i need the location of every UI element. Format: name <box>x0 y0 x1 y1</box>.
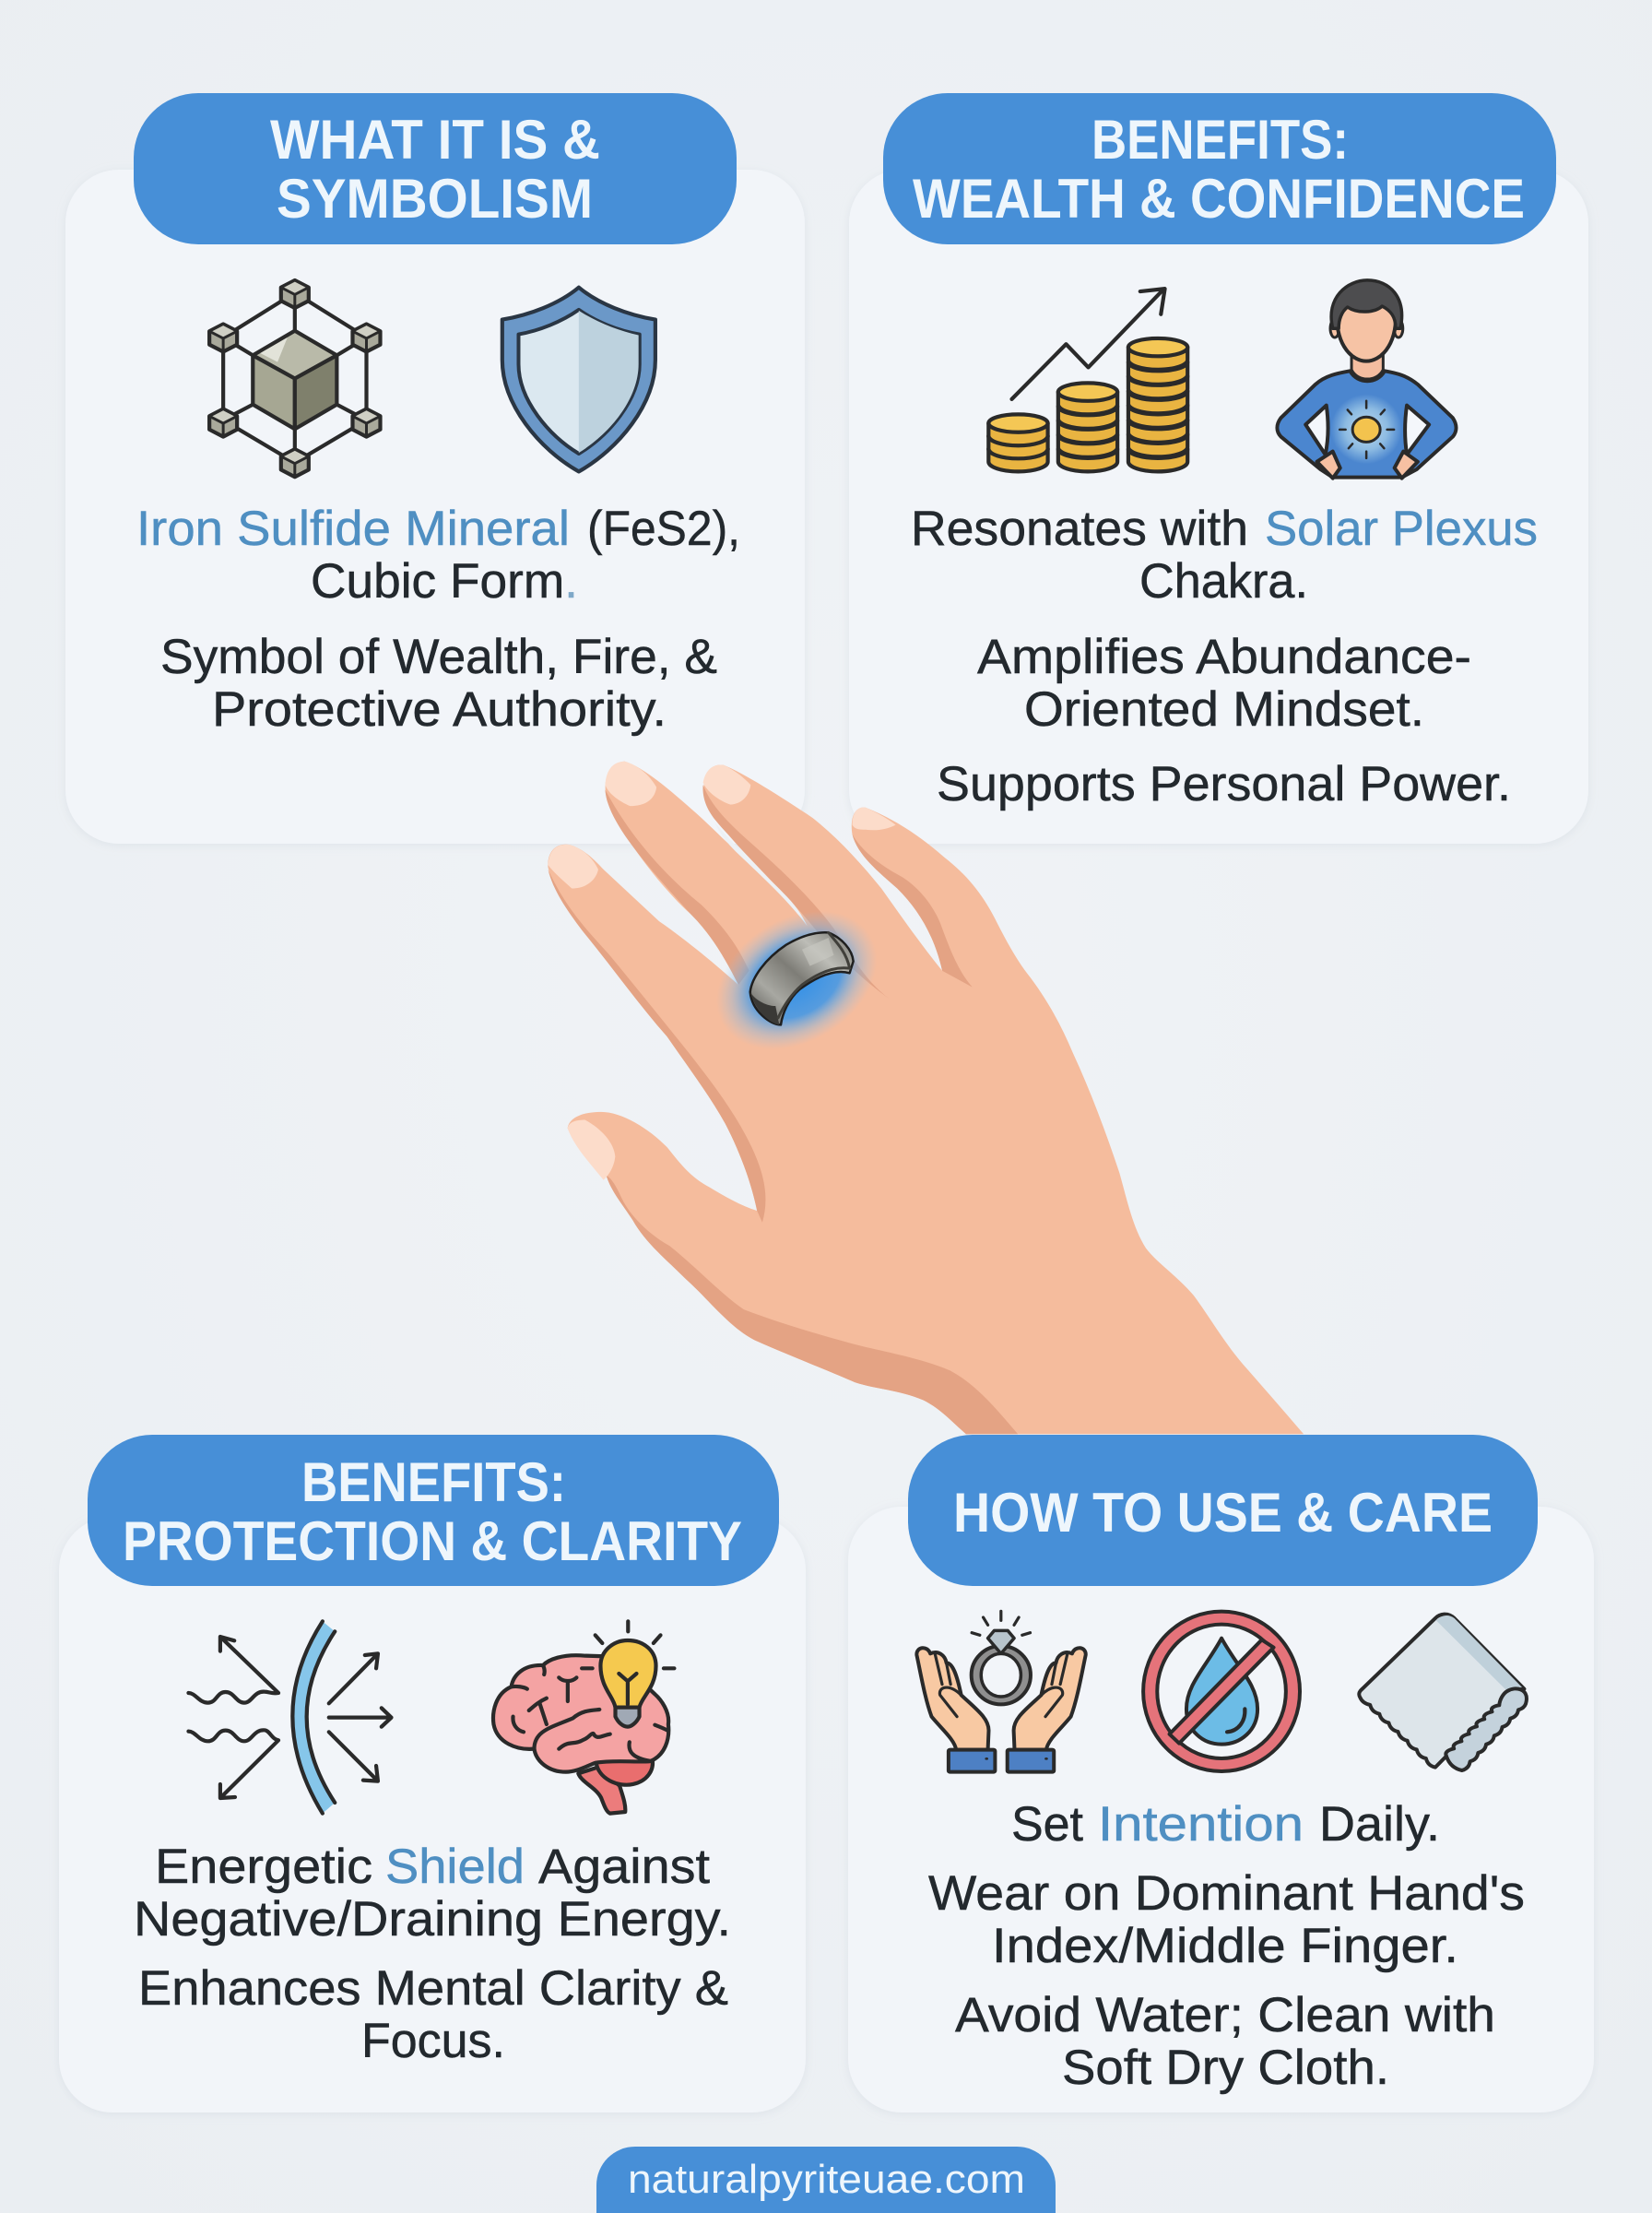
text: abundance mindset: Oriented Mindset. <box>1024 682 1424 737</box>
text: iron sulfide mineral <box>136 502 740 609</box>
text: energetic shield: Against <box>538 1840 710 1894</box>
icon: hands holding ring <box>916 1611 1086 1772</box>
text: energetic shield: Energetic <box>155 1840 372 1894</box>
heading: how to use and care: HOW TO USE & CARE <box>953 1482 1493 1544</box>
text: symbol of wealth: Protective Authority. <box>212 682 667 737</box>
heading: how to use and care <box>908 1435 1538 1586</box>
illustration: hand wearing ring <box>548 762 1304 1434</box>
text: solar plexus: Resonates with <box>911 502 1248 556</box>
heading: what it is and symbolism <box>134 93 737 244</box>
text: mental clarity: Enhances Mental Clarity & <box>138 1961 728 2016</box>
text: energetic shield <box>134 1840 731 1947</box>
text: set intention <box>1011 1797 1440 1852</box>
icon: confident person with solar plexus sun <box>1277 280 1456 479</box>
text: avoid water: Avoid Water; Clean with <box>955 1988 1495 2042</box>
icon: soft cloth <box>1359 1615 1527 1770</box>
heading: wealth and confidence: BENEFITS: <box>1092 109 1349 171</box>
text: abundance mindset <box>977 630 1471 737</box>
panel: what it is and symbolism <box>65 93 805 844</box>
finger and palm shadows <box>548 785 1018 1434</box>
text: set intention: Intention <box>1098 1797 1304 1852</box>
icon: brain with lightbulb <box>493 1621 674 1814</box>
text: set intention: Set <box>1011 1797 1083 1852</box>
heading: what it is and symbolism: WHAT IT IS & <box>270 109 600 171</box>
heading: protection and clarity <box>88 1435 779 1586</box>
icon: energy shield deflecting arrows <box>188 1621 391 1814</box>
text: solar plexus <box>911 502 1538 609</box>
text: mental clarity <box>138 1961 728 2068</box>
icon: no water <box>1143 1612 1300 1771</box>
text: iron sulfide mineral: Cubic Form. <box>311 554 578 609</box>
text: wear on dominant hand: Index/Middle Finger. <box>992 1919 1458 1973</box>
icon: cubic crystal lattice <box>209 280 380 477</box>
heading: what it is and symbolism: SYMBOLISM <box>277 168 593 230</box>
ring blue glow <box>686 883 908 1077</box>
footer: website: naturalpyriteuae.com <box>628 2157 1025 2202</box>
panel: benefits wealth and confidence <box>849 93 1588 844</box>
text: avoid water <box>955 1988 1495 2095</box>
text: avoid water: Soft Dry Cloth. <box>1062 2041 1389 2095</box>
ring <box>750 932 854 1024</box>
footer: website <box>596 2147 1056 2213</box>
text: symbol of wealth <box>160 630 717 737</box>
text: abundance mindset: Amplifies Abundance- <box>977 630 1471 684</box>
panel: how to use and care <box>848 1435 1594 2112</box>
heading: wealth and confidence <box>883 93 1556 244</box>
text: energetic shield: Negative/Draining Energy. <box>134 1892 731 1947</box>
text: symbol of wealth: Symbol of Wealth, Fire, & <box>160 630 717 684</box>
fingernails <box>548 762 896 1180</box>
text: iron sulfide mineral: Iron Sulfide Mineral <box>136 502 570 556</box>
heading: protection and clarity: BENEFITS: <box>301 1451 566 1513</box>
text: wear on dominant hand <box>928 1866 1525 1973</box>
panel: benefits protection and clarity <box>59 1435 806 2112</box>
gap between middle fingers <box>714 822 808 926</box>
text: wear on dominant hand: Wear on Dominant Hand's <box>928 1866 1525 1921</box>
text: mental clarity: Focus. <box>361 2014 505 2068</box>
text: solar plexus: Solar Plexus <box>1265 502 1538 556</box>
icon: protective shield <box>502 288 655 471</box>
text: set intention: Daily. <box>1319 1797 1440 1852</box>
heading: wealth and confidence: WEALTH & CONFIDENCE <box>913 168 1525 230</box>
text: iron sulfide mineral: (FeS2), <box>587 502 740 556</box>
hand silhouette <box>548 762 1304 1434</box>
icon: coin stacks with rising arrow <box>988 289 1187 471</box>
heading: protection and clarity: PROTECTION & CLARITY <box>123 1510 742 1572</box>
text: solar plexus: Chakra. <box>1139 554 1308 609</box>
text: personal power: Supports Personal Power. <box>937 757 1511 811</box>
text: energetic shield: Shield <box>385 1840 525 1894</box>
